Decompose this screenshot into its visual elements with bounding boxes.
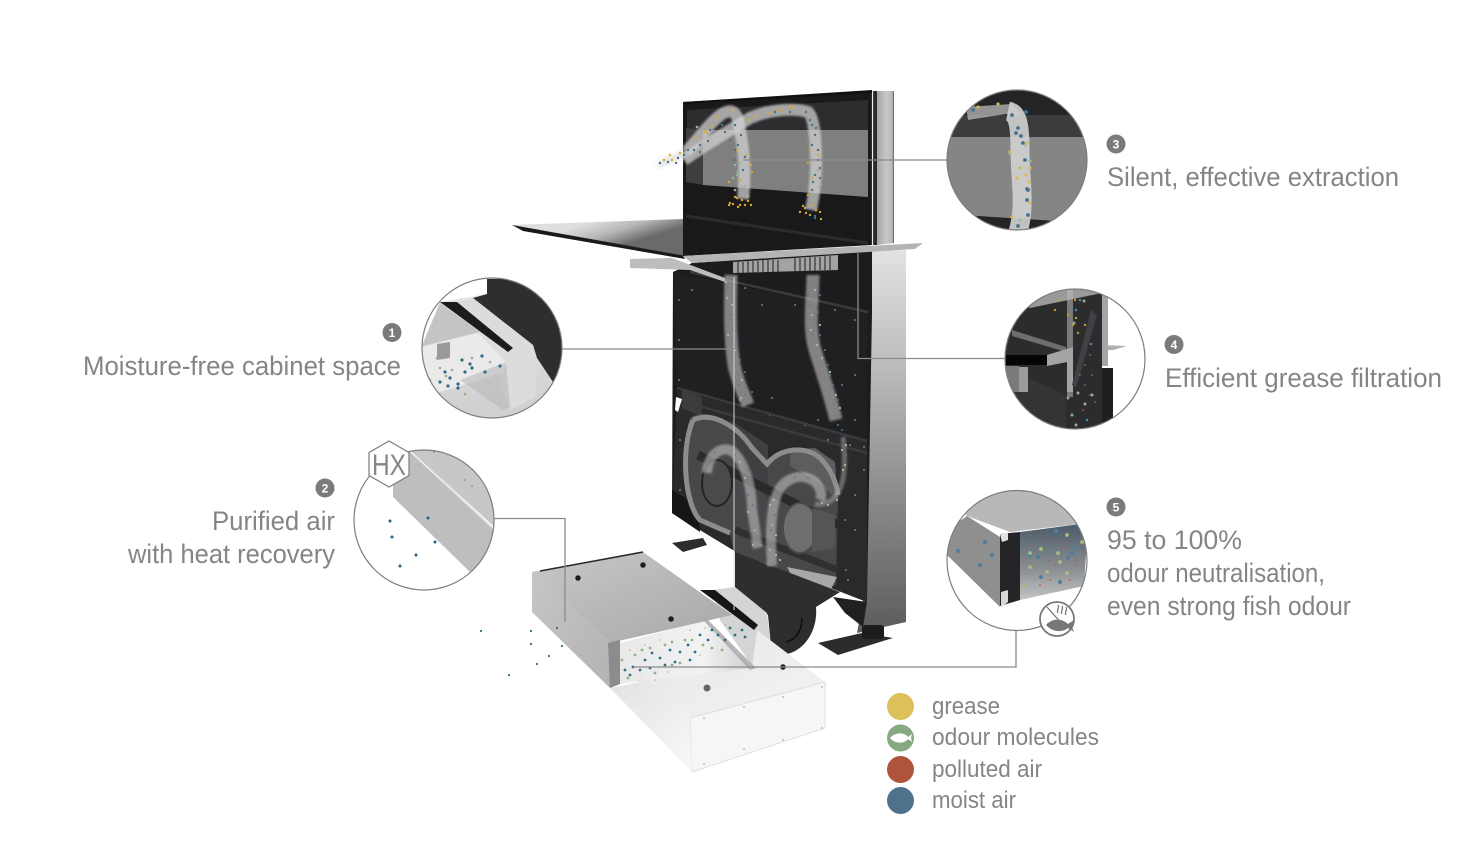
adjustable leg (862, 625, 884, 639)
right motor drum (812, 508, 835, 552)
chamber red particles (630, 625, 725, 680)
callout 5: odour neutralisation: 95 to 100% (1107, 525, 1242, 555)
detail 2 crease (412, 452, 494, 529)
plenum rivets (585, 601, 822, 764)
upper inner panel of body (673, 272, 868, 440)
upper panel grey window (703, 130, 868, 197)
left motor (702, 460, 732, 506)
detail 3 odour particles (1010, 145, 1030, 220)
callout 4: grease filtration: 4 (1171, 338, 1178, 352)
detail 5 interior (1020, 523, 1088, 600)
callout 3: silent extraction: Silent, effective extraction (1107, 162, 1399, 192)
detail 5 background (947, 490, 1089, 632)
detail 1 black strip (440, 302, 513, 352)
upper panel side column (877, 91, 894, 245)
detail 4 moist particles (1072, 300, 1091, 420)
lower extractor body side panel (857, 250, 906, 633)
legend: moist air (887, 787, 1016, 814)
detail 4 black bar (1006, 355, 1047, 365)
detail 3 grease particles (973, 104, 1030, 217)
detail 4 upper flange (1012, 330, 1066, 352)
detail 5 top face (947, 490, 1088, 532)
detail 1 bracket (437, 342, 450, 360)
detail 2 side face (393, 452, 495, 572)
lower motor housing (735, 552, 840, 657)
base bracket left (672, 490, 700, 532)
detail 4 odour particles (1068, 301, 1092, 425)
callout 1: moisture-free cabinet space: Moisture-free cabinet space (83, 351, 401, 381)
detail 1 silver duct (466, 298, 535, 410)
front hole (704, 684, 710, 692)
detail 4 dark panel (1005, 289, 1102, 431)
detail 5 red particles (1030, 540, 1076, 585)
detail circle 1: cabinet space (422, 278, 562, 418)
detail 4 filter blade (1072, 310, 1097, 388)
body rivets (679, 288, 864, 580)
fan housing rim (686, 417, 838, 533)
right fan stream (771, 477, 821, 566)
callout 2: purified air: with heat recovery (127, 539, 335, 569)
glass hob (512, 219, 683, 256)
detail 3 horizontal stream (966, 104, 1022, 120)
callout 1: moisture-free cabinet space (83, 323, 402, 381)
extractor illustration (481, 90, 923, 772)
moist air particles upper (660, 112, 820, 218)
detail 3 air stream (1008, 111, 1022, 232)
fin lines (738, 256, 830, 273)
HX hexagon badge: HX (372, 449, 406, 482)
detail 5 odour particles (1024, 535, 1082, 586)
duct black strip (700, 590, 758, 630)
callout 4: grease filtration (1164, 335, 1442, 393)
right motor (783, 503, 817, 553)
right foot (818, 633, 893, 655)
plenum box white side (610, 680, 692, 772)
mounting bracket (630, 258, 725, 282)
legend: odour molecules: odour molecules (932, 724, 1099, 751)
detail 3 upper band (947, 115, 1087, 137)
detail 4 left bracket (1019, 367, 1028, 392)
cooling fins (733, 255, 838, 273)
plenum box inner air chamber (613, 620, 752, 684)
detail 4 vertical translucent strip (1067, 290, 1073, 397)
fan housing (686, 414, 838, 592)
odour particles lower (726, 282, 846, 560)
upper panel lower ledge (686, 216, 868, 243)
central leader line (733, 277, 735, 610)
fan housing right cover (790, 448, 838, 500)
odour particles upper (697, 127, 819, 200)
plenum box white top face (650, 630, 825, 718)
exhaust dots under box (481, 628, 562, 675)
fan housing base rim (787, 567, 837, 597)
chamber green particles (622, 640, 722, 678)
air stream lower right (811, 275, 836, 420)
fan lower strut (735, 530, 838, 570)
callout 2: purified air (127, 478, 335, 569)
upper panel back (683, 91, 872, 256)
right return stream (815, 437, 844, 504)
legend: grease: grease (932, 693, 1000, 720)
detail 1 chamber (422, 333, 507, 393)
callout 5: odour neutralisation (1106, 498, 1351, 621)
callout 5: odour neutralisation: 5 (1113, 500, 1120, 514)
detail 5 moist particles (958, 531, 1075, 582)
detail 5 dark column (1000, 532, 1020, 606)
detail 5 lower light profile (1001, 590, 1008, 607)
upper panel dark column edge (872, 91, 877, 245)
callout 5: odour neutralisation: even strong fish odour (1107, 591, 1351, 621)
detail 2 upper face (412, 450, 494, 526)
chamber particles (625, 628, 745, 675)
detail 2 rivets (434, 452, 472, 486)
legend: polluted air (887, 756, 1042, 783)
leader lines (494, 160, 1016, 667)
air streams group (684, 110, 844, 566)
upper panel inner window band (687, 100, 868, 132)
detail 4 vertical bar (1102, 294, 1108, 366)
detail 1 dark motor (473, 279, 562, 382)
detail circle 4: grease filtration (1005, 289, 1147, 431)
left fan stream (707, 449, 758, 548)
detail 3 moist particles (973, 110, 1028, 226)
HX hexagon badge (369, 441, 409, 487)
callout 2: purified air: 2 (322, 482, 329, 496)
callout 2: purified air: Purified air (212, 506, 335, 536)
air stream lower left (730, 275, 748, 405)
detail 1 background (422, 278, 562, 418)
detail 4 silver profile (1047, 347, 1073, 392)
callout 3: silent extraction (1106, 134, 1399, 192)
detail 1 grey cover (422, 303, 480, 346)
upper panel column seam (872, 91, 874, 245)
detail 4 background (1005, 289, 1147, 431)
detail 4 top band (1029, 290, 1099, 308)
body side clip (682, 390, 702, 417)
legend: moist air: moist air (932, 787, 1016, 814)
air stream upper left (686, 111, 744, 199)
detail 4 right column (1102, 368, 1113, 423)
base bracket right (833, 597, 867, 627)
fan diagonal strut (698, 455, 838, 525)
hob front strip (683, 243, 923, 263)
upper panel top frame (683, 90, 872, 104)
detail 5 upper light profile (1000, 533, 1008, 542)
inner divider (703, 620, 756, 670)
lower extractor body dark back panel (672, 251, 872, 602)
body cross members (677, 272, 868, 453)
detail 1 divider (460, 362, 510, 410)
exhaust plume (658, 153, 686, 166)
lower section of body (672, 390, 867, 602)
callout 1: moisture-free cabinet space: 1 (389, 326, 396, 340)
blower wheel detail (786, 618, 802, 642)
detail 4 lower left panel (1005, 368, 1066, 431)
detail 5 side face (947, 516, 1000, 607)
connecting duct (713, 587, 772, 667)
no fish odour icon (1040, 602, 1074, 636)
plenum box top face (532, 552, 732, 643)
detail 2 background (353, 450, 495, 592)
detail 1 green particles (430, 358, 490, 394)
callout 4: grease filtration: Efficient grease filtration (1165, 363, 1442, 393)
detail 4 grease particles (1055, 300, 1085, 333)
plenum box opening frame (608, 640, 620, 688)
plenum box holes (578, 565, 783, 667)
plenum box top dark edge (540, 552, 643, 571)
grease particles upper (664, 106, 821, 219)
plenum box left face (532, 572, 610, 688)
moist particles lower (715, 285, 846, 545)
detail 4 silver shelf (1108, 345, 1127, 350)
body side notch (675, 397, 682, 412)
legend: polluted air: polluted air (932, 756, 1042, 783)
detail 3 dark background (964, 90, 1070, 230)
detail 3 grey window (947, 137, 1087, 223)
detail 1 white corner (422, 278, 487, 345)
callout 5: odour neutralisation: odour neutralisation, (1107, 558, 1325, 588)
detail 4 left translucent side (1006, 366, 1019, 392)
detail circle 3: extraction (947, 90, 1087, 232)
legend: grease (887, 693, 1000, 720)
detail circle 5: odour neutralisation (947, 490, 1089, 636)
callout 3: silent extraction: 3 (1113, 138, 1120, 152)
detail 1 particles (440, 356, 500, 388)
hob underside edge (512, 225, 685, 259)
left foot (672, 538, 707, 552)
detail 2 particles (390, 518, 435, 566)
upper panel side strip (686, 128, 703, 185)
detail 4 red particles (1080, 355, 1095, 410)
legend (887, 693, 1099, 814)
fan housing left cover (730, 420, 768, 500)
plenum box white front face (690, 682, 825, 772)
detail circle 2: purified air (353, 441, 500, 592)
air stream upper right (684, 110, 816, 210)
